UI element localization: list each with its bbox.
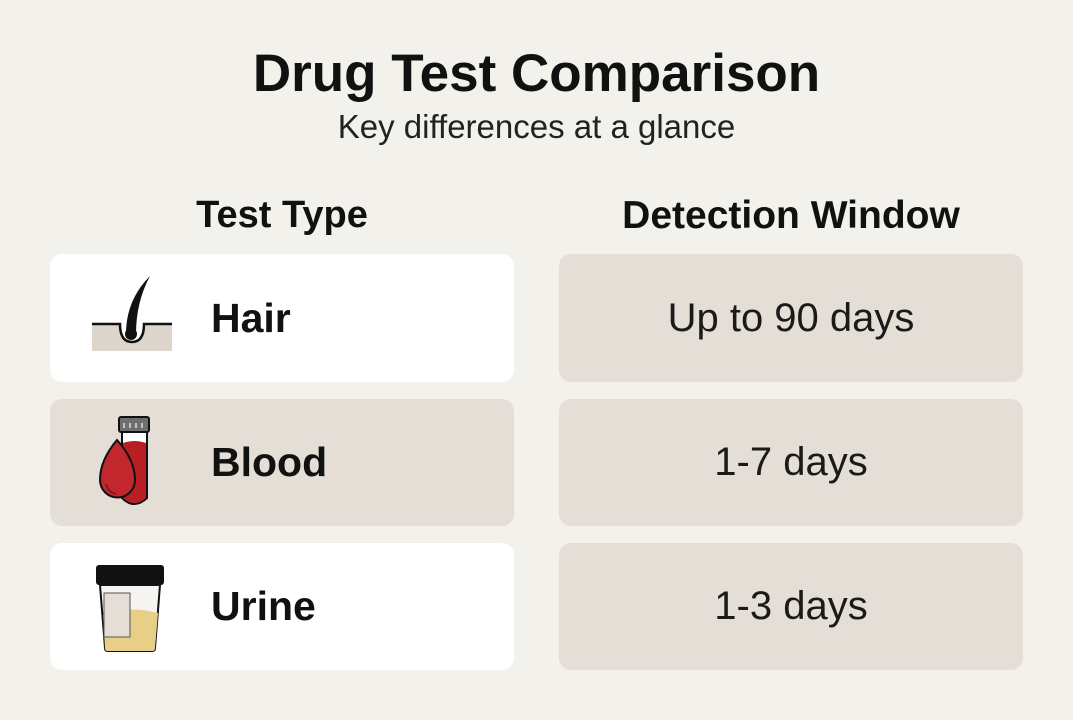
value: hair <box>559 254 1023 382</box>
icon: urine cup <box>96 565 164 652</box>
label: urine: Urine <box>211 583 316 629</box>
value: urine: 1-3 days <box>714 584 868 628</box>
header: detection window: Detection Window <box>622 194 960 237</box>
value: hair: Up to 90 days <box>668 296 914 340</box>
header: test type: Test Type <box>196 194 368 236</box>
icon: hair follicle <box>92 276 172 351</box>
value: blood: 1-7 days <box>714 440 868 484</box>
row: blood <box>50 399 514 526</box>
row: hair <box>50 254 514 382</box>
label: hair: Hair <box>211 294 291 340</box>
subtitle: Key differences at a glance <box>338 108 735 145</box>
icon: blood tube and drop <box>99 416 150 505</box>
value: blood <box>559 399 1023 526</box>
value: urine <box>559 543 1023 670</box>
label: blood: Blood <box>211 439 327 485</box>
row: urine <box>50 543 514 670</box>
title: Drug Test Comparison <box>253 44 820 103</box>
